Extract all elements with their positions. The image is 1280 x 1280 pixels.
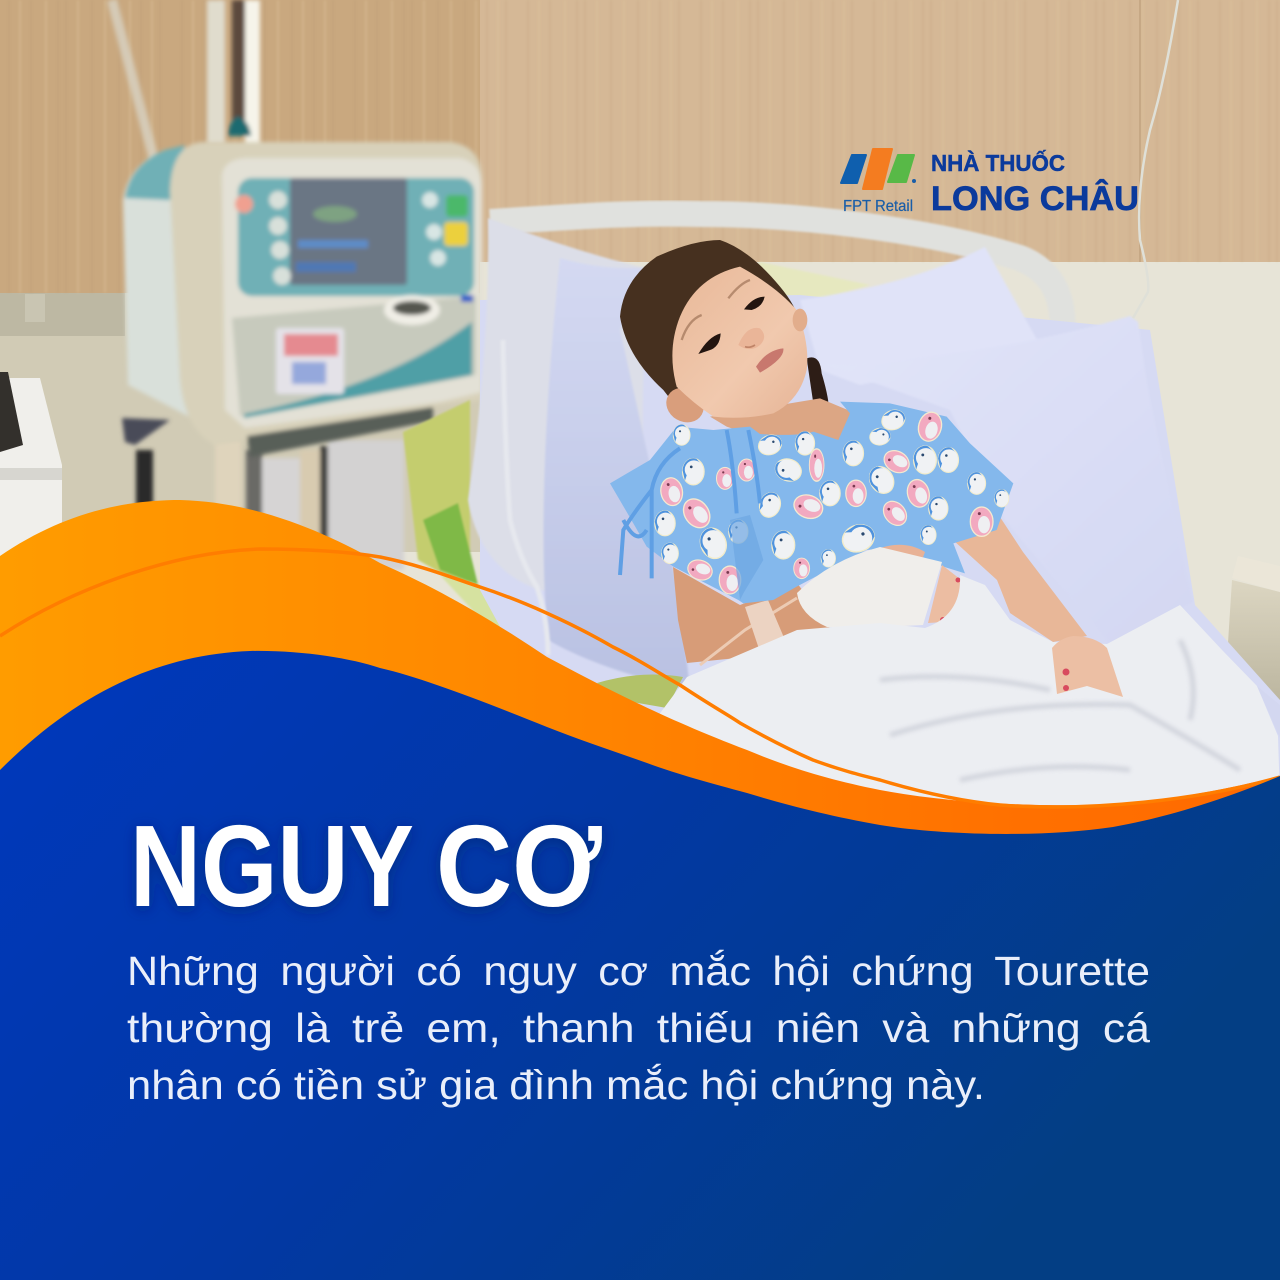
FPT Retail label: FPT Retail — [843, 198, 913, 215]
icon: FPT three-stripe mark — [841, 149, 916, 189]
gown fold — [730, 515, 763, 600]
fingers — [928, 565, 964, 623]
face — [672, 267, 807, 418]
pillow backing — [480, 295, 1280, 810]
tape — [745, 600, 785, 652]
pillow right upper — [800, 247, 1040, 385]
right arm — [953, 517, 1087, 642]
bandaged hand — [797, 547, 942, 627]
wall — [0, 0, 1280, 810]
heading: NGUY — [130, 801, 414, 931]
nose — [738, 328, 764, 349]
wooden wall panel — [0, 0, 1280, 293]
body text: thường là trẻ em, thanh thiếu niên và những cá — [127, 1005, 1150, 1051]
blanket folds — [880, 640, 1240, 780]
infusion pump — [122, 142, 482, 457]
body text: Những người có nguy cơ mắc hội chứng Tourette — [127, 948, 1150, 994]
braid — [807, 357, 828, 403]
IV line — [700, 598, 797, 665]
Nhà thuốc label: NHÀ THUỐC — [931, 149, 1065, 176]
hair — [620, 240, 800, 420]
green sheet — [597, 675, 683, 708]
gown print — [655, 407, 1009, 594]
IV tube right — [1133, 0, 1178, 318]
gown ties — [620, 430, 760, 578]
orange wave band — [0, 500, 1280, 900]
bedside cabinet left — [0, 372, 62, 570]
body text: nhân có tiền sử gia đình mắc hội chứng này. — [127, 1062, 985, 1108]
IV tube left — [503, 340, 548, 655]
bed headboard rail — [490, 214, 1063, 345]
green bedding — [403, 400, 545, 650]
body text — [127, 948, 1150, 1108]
pillow left back — [468, 218, 645, 600]
pillow right front — [825, 316, 1193, 645]
Long Châu label: LONG CHÂU — [931, 180, 1139, 218]
sheet behind head — [740, 262, 870, 305]
left arm — [673, 567, 830, 663]
background photo: hospital room — [0, 0, 1280, 815]
ear left — [660, 381, 710, 429]
logo: FPT Retail / Nhà thuốc Long Châu — [841, 149, 1139, 218]
neck — [710, 398, 852, 443]
chart papers under pump — [246, 440, 404, 570]
right hand — [1052, 636, 1123, 697]
lavender sheet at bottom right — [1257, 686, 1280, 738]
blue wave panel — [0, 651, 1280, 1280]
white blanket — [658, 575, 1280, 815]
heading: CƠ — [436, 801, 602, 931]
bedside cabinet right — [1225, 556, 1280, 720]
infusion pole — [112, 0, 260, 510]
gown — [610, 402, 1013, 603]
ear right — [793, 309, 807, 331]
thin orange line over photo — [0, 549, 1280, 807]
child figure — [610, 240, 1087, 665]
head and gown in photo coordinates — [610, 240, 1013, 603]
hand skin above bandage — [880, 545, 925, 565]
mouth — [756, 348, 783, 373]
brows — [682, 280, 750, 340]
lower left wall — [0, 292, 480, 552]
eyes — [698, 333, 721, 354]
pillow left front — [544, 258, 690, 690]
